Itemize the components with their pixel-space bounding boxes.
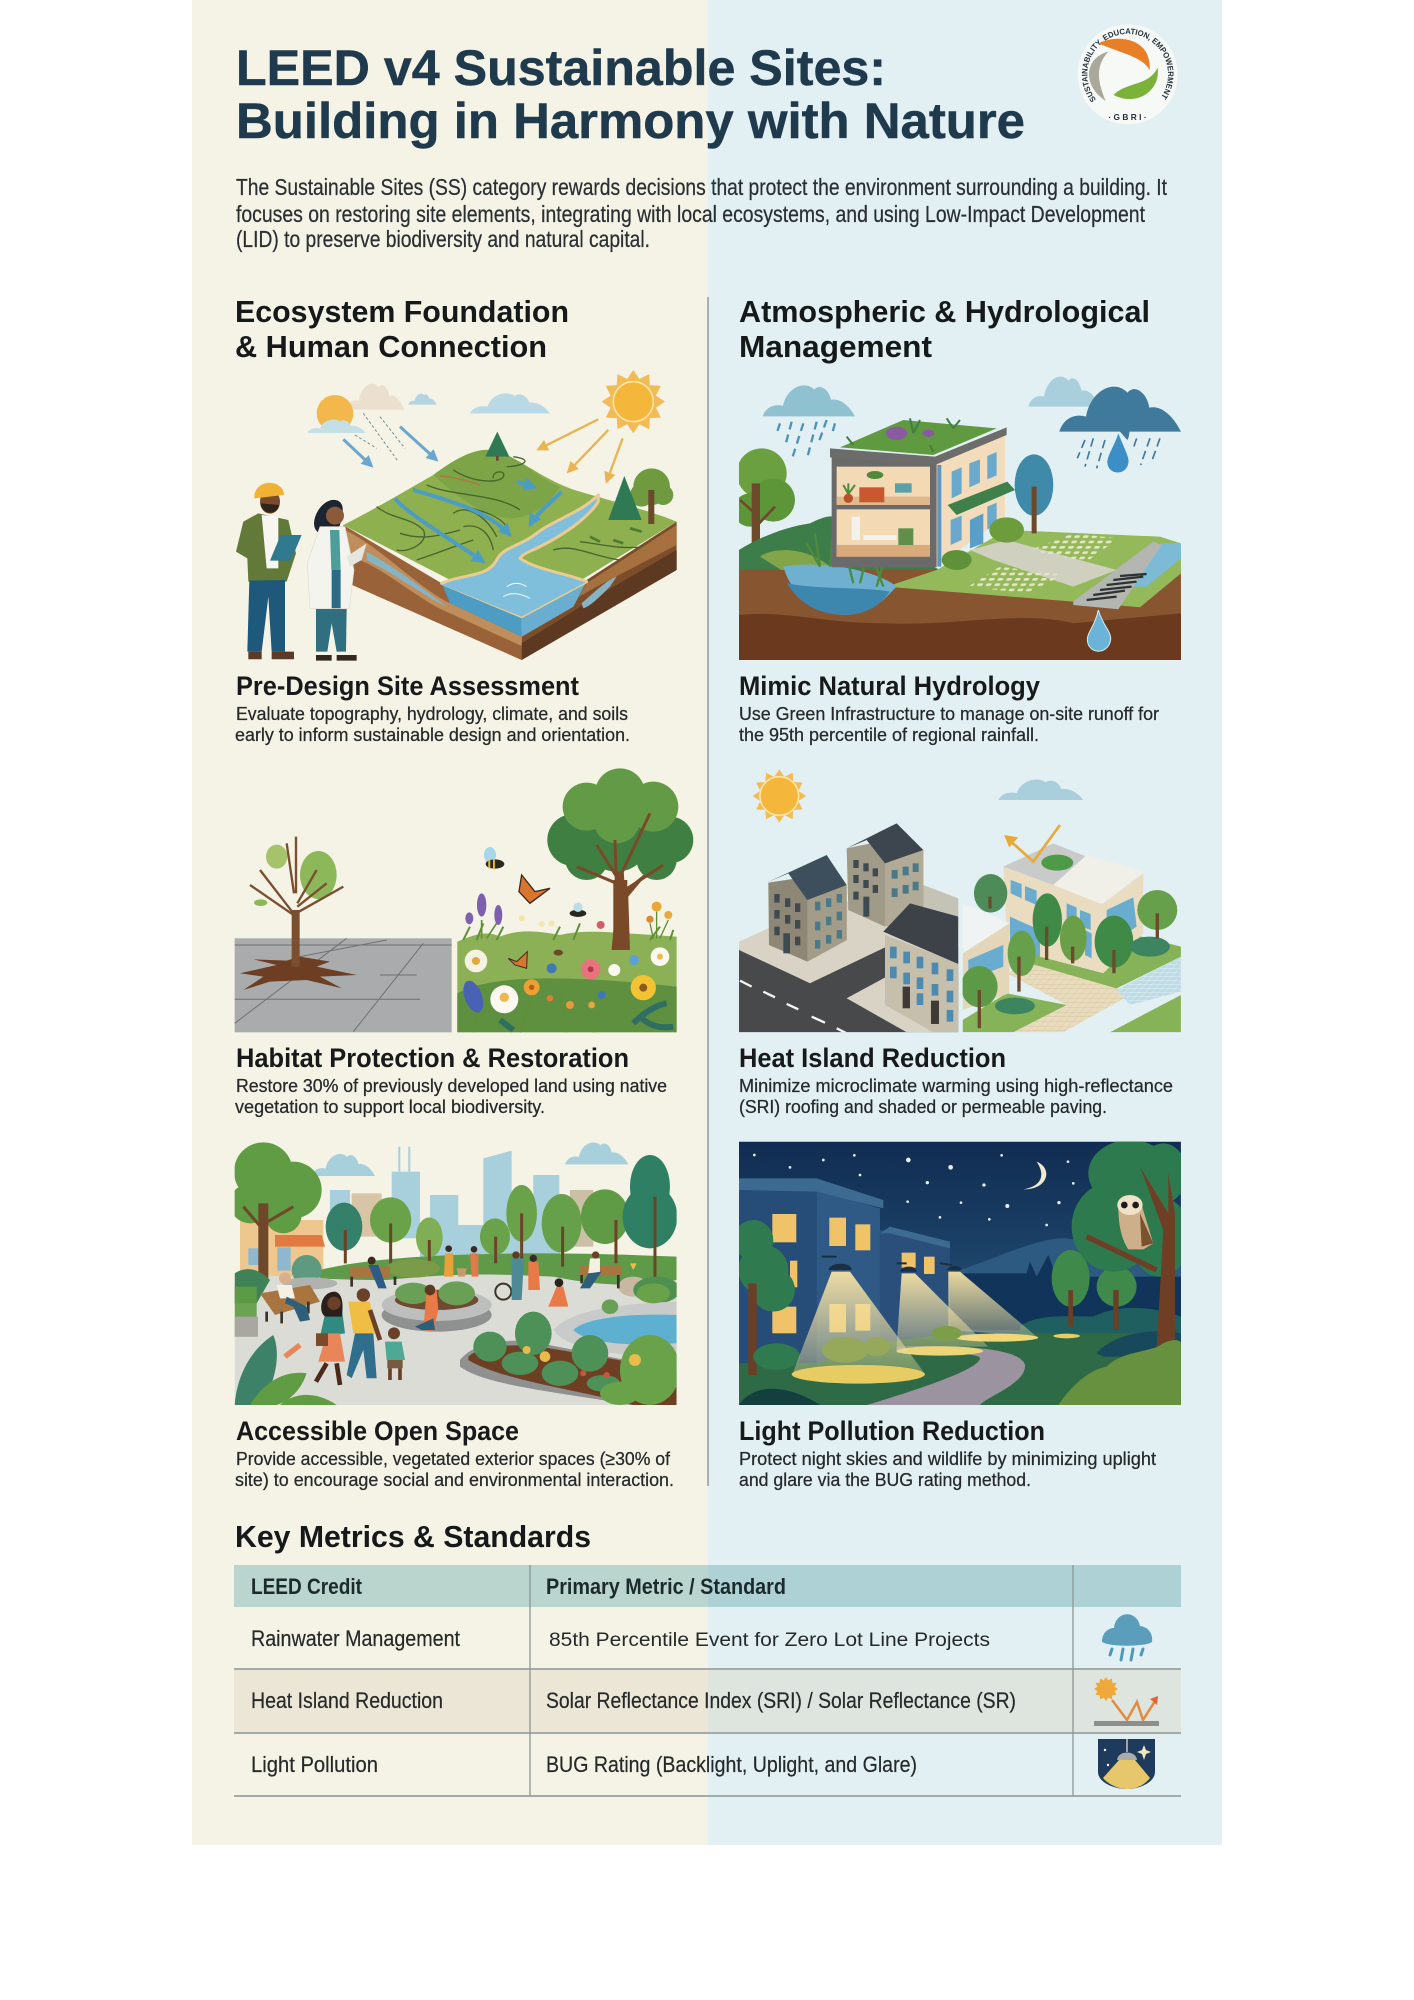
logo: GBRI badge: ·GBRI· [1108, 112, 1147, 122]
illustration: pavement versus wildflower meadow [235, 768, 693, 1032]
column divider [707, 297, 709, 1486]
panel: accessible open space [230, 1142, 680, 1490]
row: heat island reduction [251, 1688, 1016, 1713]
heading: left column: Ecosystem Foundation [235, 295, 569, 329]
item description: early to inform sustainable design and orientation. [235, 724, 630, 745]
panel: page background [192, 0, 1222, 1845]
item heading: Heat Island Reduction [739, 1043, 1006, 1073]
item heading: Accessible Open Space [236, 1416, 519, 1446]
item description [739, 1075, 1173, 1117]
item description [739, 703, 1159, 745]
heading: key metrics: Key Metrics & Standards [235, 1519, 591, 1554]
item description [235, 703, 630, 745]
heading: right column: Atmospheric & Hydrological [739, 295, 1150, 329]
heading: left column: & Human Connection [235, 330, 547, 364]
item description: site) to encourage social and environmental interaction. [235, 1469, 674, 1490]
intro text: (LID) to preserve biodiversity and natural capital. [236, 226, 650, 252]
panel: habitat protection [235, 768, 693, 1117]
item description: Evaluate topography, hydrology, climate, and soils [236, 703, 628, 724]
illustration: night scene with shielded lights and owl [733, 1140, 1190, 1405]
table header text: LEED Credit [251, 1574, 363, 1599]
item heading: Mimic Natural Hydrology [739, 671, 1040, 701]
icon: rain cloud [1102, 1614, 1152, 1660]
item description: (SRI) roofing and shaded or permeable paving. [739, 1096, 1107, 1117]
panel: mimic natural hydrology [733, 377, 1181, 745]
item heading: Habitat Protection & Restoration [236, 1043, 629, 1073]
panel: pre-design site assessment [235, 370, 677, 745]
illustration: green-roof building, rain garden, permeable paving [733, 377, 1181, 660]
icon: owl on branch [1117, 1195, 1153, 1249]
table header text [251, 1574, 786, 1599]
item description [739, 1448, 1156, 1490]
illustration: urban park with people [230, 1142, 680, 1405]
intro text: The Sustainable Sites (SS) category rewards decisions that protect the environment surrounding a building. It [236, 174, 1167, 200]
table header band [234, 1565, 1181, 1607]
item description: vegetation to support local biodiversity. [235, 1096, 545, 1117]
panel: light pollution reduction [733, 1140, 1190, 1490]
title: LEED v4 Sustainable Sites: [236, 40, 886, 96]
illustration: dark city block versus cool-roof campus [739, 769, 1181, 1033]
row: light pollution: Light Pollution [251, 1752, 378, 1777]
item description: Use Green Infrastructure to manage on-site runoff for [739, 703, 1159, 724]
item description: Provide accessible, vegetated exterior spaces (≥30% of [236, 1448, 671, 1469]
heading: left column [235, 295, 569, 364]
logo: GBRI badge: SUSTAINABILITY, EDUCATION, EMPOWERMENT [1082, 28, 1174, 102]
icon: solar reflectance [1094, 1677, 1159, 1726]
item heading: Pre-Design Site Assessment [236, 671, 579, 701]
title: Building in Harmony with Nature [236, 93, 1025, 149]
item description: Protect night skies and wildlife by minimizing uplight [739, 1448, 1156, 1469]
intro text: focuses on restoring site elements, integrating with local ecosystems, and using Low-Impact Development [236, 201, 1145, 227]
person: scientist in lab coat [307, 500, 367, 661]
row: rainwater management: 85th Percentile Event for Zero Lot Line Projects [549, 1629, 990, 1651]
row: light pollution [251, 1752, 917, 1777]
item description [235, 1075, 667, 1117]
row: light pollution: BUG Rating (Backlight, Uplight, and Glare) [546, 1752, 917, 1777]
panel: heat island reduction [739, 769, 1181, 1117]
item description: the 95th percentile of regional rainfall. [739, 724, 1039, 745]
icon: shielded light [1098, 1739, 1155, 1789]
item heading: Light Pollution Reduction [739, 1416, 1045, 1446]
title [236, 40, 1025, 149]
row: rainwater management: Rainwater Management [251, 1626, 460, 1651]
illustration: site block with two people [236, 370, 677, 661]
heading: right column [739, 295, 1150, 364]
row: rainwater management [251, 1626, 990, 1651]
table: key metrics and standards [234, 1565, 1181, 1796]
row: heat island reduction: Heat Island Reduction [251, 1688, 443, 1713]
table header text: Primary Metric / Standard [546, 1574, 786, 1599]
item description [235, 1448, 674, 1490]
intro text [236, 174, 1167, 252]
item description: and glare via the BUG rating method. [739, 1469, 1031, 1490]
row: heat island reduction: Solar Reflectance Index (SRI) / Solar Reflectance (SR) [546, 1688, 1016, 1713]
item description: Restore 30% of previously developed land using native [236, 1075, 667, 1096]
heading: right column: Management [739, 330, 932, 364]
highlighted row band [234, 1670, 1181, 1733]
item description: Minimize microclimate warming using high-reflectance [739, 1075, 1173, 1096]
person: engineer with hard hat [236, 483, 302, 659]
